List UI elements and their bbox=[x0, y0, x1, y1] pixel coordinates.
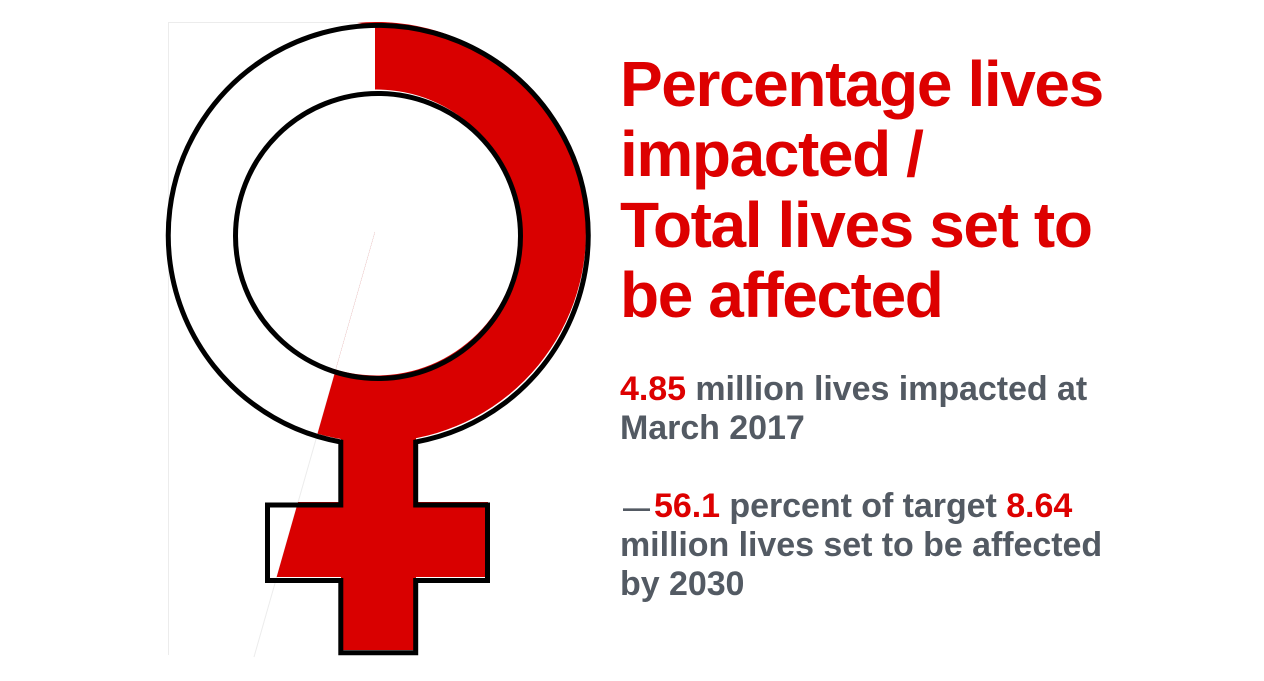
title: Total lives set to bbox=[620, 189, 1092, 261]
symbol outline bbox=[168, 25, 588, 653]
text block: percent of target bbox=[620, 487, 1102, 603]
text block: lives impacted bbox=[620, 370, 1087, 447]
text block: lives impacted: 4.85 million lives impacted at bbox=[620, 370, 1087, 408]
icon: female symbol progress gauge bbox=[166, 22, 588, 657]
text block: lives impacted: March 2017 bbox=[620, 409, 805, 447]
red fill: 56.1 percent portion bbox=[276, 22, 586, 650]
inner ring outline bbox=[236, 94, 520, 378]
text block: percent of target: 56.1 bbox=[654, 487, 720, 525]
title: Percentage lives bbox=[620, 48, 1103, 120]
title bbox=[620, 48, 1103, 331]
text block: percent of target: million lives set to be affected bbox=[620, 526, 1102, 564]
text block: percent of target: by 2030 bbox=[620, 565, 744, 603]
text block: percent of target: — bbox=[623, 493, 650, 523]
title: impacted / bbox=[620, 118, 924, 190]
text block: percent of target: percent of target 8.64 bbox=[729, 487, 1072, 525]
title: be affected bbox=[620, 259, 942, 331]
